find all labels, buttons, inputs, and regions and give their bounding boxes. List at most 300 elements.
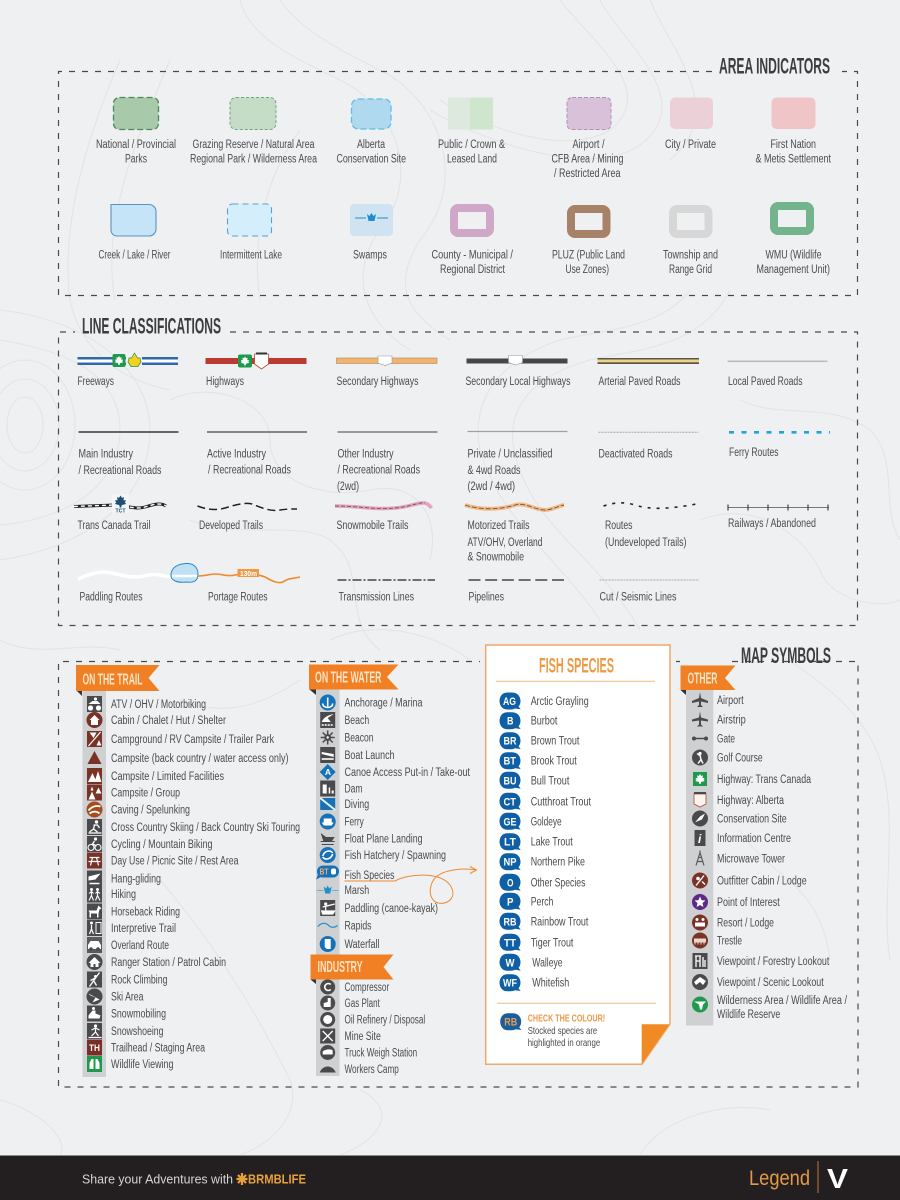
badge: AG: AG (503, 696, 516, 708)
icon: workers camp (320, 1066, 336, 1072)
line: other industry roads (337, 432, 438, 493)
callout: check the colour: Stocked species are (528, 1025, 597, 1037)
row: snowshoeing: Snowshoeing (111, 1026, 164, 1038)
row: workers camp: Workers Camp (344, 1064, 399, 1076)
line: routes: Routes (605, 520, 633, 532)
swatch: intermittent lake (220, 204, 282, 262)
row: rapids (318, 920, 372, 932)
swatch: city: City / Private (665, 139, 716, 151)
icon: hang-gliding (87, 870, 102, 886)
line: secondary highways (336, 356, 437, 388)
line: transmission lines (338, 580, 435, 604)
swatch: county (432, 208, 514, 276)
line: secondary local highways (466, 356, 571, 388)
panel: area indicators (58, 54, 858, 296)
row: information centre (694, 830, 791, 846)
line: snowmobile trails: Snowmobile Trails (336, 520, 409, 532)
row: ski area: Ski Area (111, 992, 144, 1004)
icon: ferry (320, 814, 336, 830)
icon: golf (692, 750, 708, 766)
row: airport: Airport (717, 695, 744, 707)
icon: trailhead: TH (89, 1043, 100, 1054)
row: campsite back country: Campsite (back country / water access only) (111, 753, 289, 765)
row: other species (500, 874, 586, 891)
row: caving (86, 802, 190, 818)
row: ski area (86, 988, 144, 1004)
line: cut / seismic lines: Cut / Seismic Lines (600, 592, 677, 604)
line: motorized trails (465, 504, 564, 564)
row: perch (500, 893, 553, 910)
icon: scenic lookout (692, 974, 708, 990)
icon: horse (87, 904, 102, 920)
row: brook trout (500, 752, 577, 769)
icon: compressor (320, 980, 335, 994)
row: arctic grayling (500, 692, 589, 710)
row: ranger station (86, 954, 226, 970)
row: campsite group (87, 784, 180, 800)
icon: waterfall (320, 936, 336, 952)
swatch: county: County - Municipal / (432, 250, 514, 262)
row: gas plant: Gas Plant (344, 998, 380, 1010)
ribbon: other (680, 666, 736, 690)
line: routes (604, 503, 696, 549)
line: snowmobile trails (335, 503, 432, 532)
row: caving: Caving / Spelunking (111, 804, 190, 816)
icon: campsite back country (88, 751, 102, 764)
line: other industry roads: (2wd) (337, 481, 359, 493)
row: golf course (692, 750, 763, 766)
row: snowmobiling: Snowmobiling (111, 1008, 166, 1020)
icon: resort (692, 914, 708, 930)
line: arterial paved roads: Arterial Paved Roads (598, 376, 681, 388)
row: whitefish (500, 974, 569, 991)
icon: fish hatchery (320, 847, 336, 863)
row: arctic grayling: Arctic Grayling (531, 696, 589, 708)
line: railways: Railways / Abandoned (728, 518, 816, 530)
swatch: first nation: & Metis Settlement (756, 154, 832, 166)
row: hiking: Hiking (111, 889, 136, 901)
line: developed trails (198, 503, 297, 532)
line: other industry roads: Other Industry (338, 448, 394, 460)
swatch: airport (552, 98, 624, 180)
row: fish species (316, 866, 395, 882)
icon: caving (86, 802, 102, 818)
row: ferry (320, 814, 364, 830)
swatch: national parks: National / Provincial (96, 139, 176, 151)
row: hang-gliding (87, 870, 161, 886)
line: highways (206, 352, 306, 388)
row: oil refinery (320, 1012, 425, 1027)
icon: rock climbing (87, 972, 102, 988)
row: lake trout (500, 833, 573, 850)
ribbon: industry (310, 954, 394, 980)
heading: fish species: FISH SPECIES (539, 655, 614, 678)
row: boat launch (320, 747, 394, 763)
icon: truck weigh station (320, 1045, 335, 1060)
icon: ranger station (86, 954, 102, 970)
row: whitefish: Whitefish (532, 978, 569, 990)
line: main industry roads: / Recreational Roads (78, 465, 162, 477)
swatch: grazing reserve: Regional Park / Wilderness Area (190, 154, 317, 166)
row: wildlife viewing (87, 1056, 174, 1072)
row: bull trout (500, 772, 570, 789)
line: local paved roads: Local Paved Roads (728, 376, 803, 388)
badge: BT: BT (504, 756, 516, 768)
icon: conservation site (692, 810, 708, 826)
badge: WF: WF (503, 978, 517, 990)
line: trans canada trail: TCT (116, 508, 126, 514)
callout: check the colour: CHECK THE COLOUR! (528, 1012, 605, 1024)
row: beach: Beach (344, 715, 369, 727)
panel: map symbols (58, 643, 858, 1087)
icon: dam (320, 780, 335, 796)
row: other species: Other Species (531, 877, 586, 889)
swatch: creek (98, 204, 171, 262)
row: beacon (321, 730, 374, 744)
footer text: Share your Adventures with (82, 1172, 233, 1186)
list: on the trail (76, 665, 300, 1077)
row: campsite limited (87, 768, 224, 784)
line: arterial paved roads (598, 358, 699, 388)
icon: airstrip (692, 712, 708, 726)
row: resort: Resort / Lodge (717, 918, 774, 930)
row: cabin: Cabin / Chalet / Hut / Shelter (111, 715, 226, 727)
icon: paddling (320, 900, 335, 916)
swatch: city (665, 98, 716, 151)
icon: point of interest (692, 894, 708, 910)
row: perch: Perch (531, 896, 553, 908)
fold corner (642, 1024, 670, 1064)
row: overland route: Overland Route (111, 940, 169, 952)
row: overland route (87, 937, 169, 953)
row: dam: Dam (344, 784, 362, 796)
line: trans canada trail (74, 494, 166, 532)
line: freeways: Freeways (78, 376, 114, 388)
row: wilderness area: Wilderness Area / Wildlife Area / (717, 995, 848, 1007)
panel: fish species (486, 645, 670, 1064)
row: lake trout: Lake Trout (531, 837, 573, 849)
swatch: airport: / Restricted Area (554, 168, 621, 180)
row: cross country skiing: Cross Country Skiing / Back Country Ski Touring (111, 822, 300, 834)
icon: hiking (87, 886, 102, 902)
row: bull trout: Bull Trout (531, 775, 570, 787)
line: trans canada trail: Trans Canada Trail (78, 520, 150, 532)
icon: float plane (321, 834, 335, 844)
ribbon: on the water (309, 664, 398, 690)
line: pipelines: Pipelines (468, 592, 504, 604)
legend label: Legend (749, 1167, 810, 1190)
row: cycling: Cycling / Mountain Biking (111, 839, 212, 851)
row: highway alberta (694, 792, 784, 807)
row: mine site: Mine Site (344, 1031, 381, 1043)
row: airport (692, 692, 744, 707)
icon: marsh (317, 886, 339, 894)
ribbon: on the trail (76, 665, 160, 691)
icon: beach (320, 712, 335, 728)
row: wilderness area (692, 995, 848, 1021)
row: canoe access (320, 764, 471, 780)
swatch: grazing reserve: Grazing Reserve / Natural Area (192, 139, 315, 151)
line: developed trails: Developed Trails (199, 520, 263, 532)
icon: mine site (320, 1028, 335, 1044)
icon: snowmobile (87, 1006, 102, 1022)
row: compressor (320, 980, 389, 994)
row: fish hatchery (320, 847, 446, 863)
badge: W: W (506, 957, 515, 969)
line: railways (728, 504, 829, 530)
icon: interpretive trail (87, 920, 102, 936)
row: wildlife viewing: Wildlife Viewing (111, 1059, 174, 1071)
icon: overland vehicle (87, 937, 102, 953)
row: beacon: Beacon (344, 732, 374, 744)
row: trailhead: Trailhead / Staging Area (111, 1042, 205, 1054)
swatch: PLUZ: PLUZ (Public Land (552, 250, 625, 262)
icon: campsite limited (87, 768, 102, 784)
row: day use (87, 852, 239, 868)
row: wilderness area: Wildlife Reserve (717, 1009, 780, 1021)
row: fish species: Fish Species (344, 870, 395, 882)
ribbon: other: OTHER (688, 670, 718, 688)
icon: cycling (87, 836, 102, 852)
row: trailhead (87, 1040, 205, 1056)
swatch: conservation site (336, 99, 406, 166)
row: snowshoeing (87, 1023, 164, 1039)
icon: trans canada shield (693, 772, 707, 786)
badge: RB: RB (504, 916, 517, 928)
icon: airport (692, 692, 708, 707)
row: golf course: Golf Course (717, 752, 763, 764)
row: campsite back country (88, 751, 289, 765)
row: rainbow trout: Rainbow Trout (531, 916, 589, 928)
swatch: swamps (350, 204, 393, 262)
row: campground: Campground / RV Campsite / Trailer Park (111, 734, 274, 746)
callout: check the colour: highlighted in orange (528, 1037, 600, 1049)
row: rock climbing (87, 972, 168, 988)
swatch: airport: Airport / (572, 139, 605, 151)
row: gate: Gate (717, 734, 735, 746)
row: microwave tower (696, 850, 785, 866)
swatch: conservation site: Alberta (357, 139, 385, 151)
badge: NP: NP (504, 857, 516, 869)
list: other (680, 666, 848, 1026)
callout: check the colour (500, 1012, 605, 1049)
swatch: public land (438, 98, 505, 166)
line: active industry roads (207, 432, 307, 476)
row: ATV (87, 696, 206, 712)
line: active industry roads: / Recreational Roads (208, 464, 291, 476)
row: hiking (87, 886, 136, 902)
row: waterfall (320, 936, 380, 952)
icon: brmblife logo (236, 1173, 248, 1185)
line: portage routes: 130m (240, 571, 257, 578)
icon: outfitter (692, 872, 708, 888)
row: tiger trout: Tiger Trout (531, 937, 574, 949)
row: interpretive trail: Interpretive Trail (111, 923, 176, 935)
badge: BR: BR (504, 736, 517, 748)
line: secondary local highways: Secondary Local Highways (466, 376, 571, 388)
row: goldeye (500, 813, 562, 830)
row: truck weigh station (320, 1045, 417, 1060)
row: paddling (320, 900, 438, 916)
heading: line classifications: LINE CLASSIFICATIONS (82, 314, 221, 338)
line: private roads: (2wd / 4wd) (468, 481, 515, 493)
icon: fish species: BT (320, 868, 329, 876)
heading: map symbols: MAP SYMBOLS (741, 643, 831, 668)
icon: alberta shield (694, 792, 706, 807)
row: anchorage (320, 694, 423, 710)
icon: rapids (318, 923, 338, 927)
line: paddling routes (78, 563, 198, 604)
swatch: grazing reserve (190, 98, 317, 166)
row: mine site (320, 1028, 381, 1044)
row: horseback riding (87, 904, 180, 920)
icon: picnic (87, 852, 102, 868)
row: resort (692, 914, 774, 930)
row: fish hatchery: Fish Hatchery / Spawning (344, 850, 446, 862)
row: conservation site: Conservation Site (717, 814, 787, 826)
row: goldeye: Goldeye (531, 816, 562, 828)
badge: TT: TT (504, 937, 516, 949)
row: brown trout: Brown Trout (531, 736, 580, 748)
row: paddling: Paddling (canoe-kayak) (344, 903, 438, 915)
row: viewpoint scenic (692, 974, 824, 990)
line: motorized trails: & Snowmobile (468, 552, 524, 564)
row: workers camp (320, 1064, 399, 1076)
line: other industry roads: / Recreational Roads (338, 464, 420, 476)
row: cabin (86, 712, 226, 728)
row: interpretive trail (87, 920, 176, 936)
brand name: BRMBLIFE (248, 1172, 306, 1186)
row: rock climbing: Rock Climbing (111, 974, 168, 986)
swatch: public land: Public / Crown & (438, 139, 505, 151)
swatch: swamps: Swamps (353, 250, 387, 262)
row: snowmobiling (87, 1006, 166, 1022)
line: private roads: & 4wd Roads (468, 465, 521, 477)
row: rainbow trout (500, 913, 589, 930)
row: burbot: Burbot (531, 716, 558, 728)
row: walleye: Walleye (532, 957, 563, 969)
line: main industry roads (78, 432, 178, 477)
row: day use: Day Use / Picnic Site / Rest Area (111, 856, 239, 868)
icon: ATV (87, 696, 102, 712)
row: ATV: ATV / OHV / Motorbiking (111, 699, 206, 711)
row: ranger station: Ranger Station / Patrol Cabin (111, 957, 226, 969)
row: beach (320, 712, 369, 728)
row: information centre: Information Centre (717, 833, 791, 845)
badge: BU: BU (504, 775, 517, 787)
icon: gas plant (320, 996, 335, 1010)
icon: campground (87, 731, 102, 747)
line: highways: Highways (206, 376, 244, 388)
icon: boat launch (320, 747, 335, 763)
row: microwave tower: Microwave Tower (717, 854, 785, 866)
line: portage routes: Portage Routes (208, 592, 268, 604)
line: private roads: Private / Unclassified (468, 448, 552, 460)
badge: P: P (507, 896, 514, 908)
swatch: WMU: WMU (Wildlife (766, 250, 822, 262)
row: northern pike: Northern Pike (531, 857, 585, 869)
swatch: intermittent lake: Intermittent Lake (220, 250, 282, 262)
row: campsite group: Campsite / Group (111, 788, 180, 800)
list: on the water (309, 664, 471, 1076)
icon: anchor (320, 694, 336, 710)
ribbon: on the trail: ON THE TRAIL (82, 672, 143, 688)
row: brown trout (500, 732, 580, 749)
badge: RB stocked: RB (504, 1017, 517, 1029)
ribbon: industry: INDUSTRY (318, 959, 363, 976)
line: routes: (Undeveloped Trails) (605, 537, 687, 549)
row: burbot (500, 712, 558, 729)
swatch: national parks: Parks (125, 154, 147, 166)
row: float plane landing: Float Plane Landing (344, 834, 422, 846)
icon: wilderness area (692, 996, 708, 1012)
row: outfitter cabin: Outfitter Cabin / Lodge (717, 876, 807, 888)
row: oil refinery: Oil Refinery / Disposal (344, 1014, 425, 1026)
swatch: first nation (756, 98, 832, 166)
line: motorized trails: Motorized Trails (468, 520, 530, 532)
icon: diving flag (320, 798, 335, 810)
swatch: WMU (756, 206, 830, 276)
icon: canoe access: A (325, 767, 331, 777)
line: active industry roads: Active Industry (207, 448, 266, 460)
icon: information: i (698, 832, 702, 846)
badge: O: O (507, 877, 514, 889)
row: boat launch: Boat Launch (344, 750, 394, 762)
icon: cabin (86, 712, 102, 728)
row: highway trans canada (693, 772, 811, 786)
ribbon: on the water: ON THE WATER (315, 670, 382, 686)
row: viewpoint forestry: Viewpoint / Forestry Lookout (717, 956, 830, 968)
row: walleye (500, 954, 563, 971)
badge: B: B (507, 716, 514, 728)
line: ferry routes (729, 432, 830, 459)
row: trestle (692, 932, 742, 948)
row: anchorage: Anchorage / Marina (344, 698, 423, 710)
row: cutthroat trout (500, 793, 592, 810)
row: truck weigh station: Truck Weigh Station (344, 1048, 417, 1060)
row: brook trout: Brook Trout (531, 756, 577, 768)
swatch: township (663, 209, 718, 276)
row: rapids: Rapids (344, 920, 372, 932)
row: airstrip: Airstrip (717, 714, 746, 726)
row: cross country skiing (87, 819, 300, 835)
swatch: creek: Creek / Lake / River (98, 250, 171, 262)
icon: ski area (86, 988, 102, 1004)
row: compressor: Compressor (344, 982, 389, 994)
row: viewpoint scenic: Viewpoint / Scenic Lookout (717, 977, 824, 989)
icon: snowshoe (87, 1023, 102, 1039)
row: outfitter cabin (692, 872, 807, 888)
line: ferry routes: Ferry Routes (729, 447, 779, 459)
icon: campsite group (87, 784, 102, 800)
row: diving (320, 798, 369, 811)
icon: skiing (87, 819, 102, 835)
row: marsh (317, 885, 369, 897)
line: private roads (468, 432, 568, 493)
icon: beacon (321, 730, 335, 744)
row: highway alberta: Highway: Alberta (717, 795, 784, 807)
row: campsite limited: Campsite / Limited Facilities (111, 771, 224, 783)
line: portage routes (198, 569, 300, 604)
line: motorized trails: ATV/OHV, Overland (468, 537, 542, 549)
row: highway trans canada: Highway: Trans Canada (717, 774, 811, 786)
logo letter V: V (827, 1163, 848, 1194)
icon: gate (692, 736, 708, 740)
swatch: public land: Leased Land (447, 154, 497, 166)
row: ferry: Ferry (344, 816, 364, 828)
row: northern pike (500, 853, 585, 870)
row: marsh: Marsh (344, 885, 369, 897)
